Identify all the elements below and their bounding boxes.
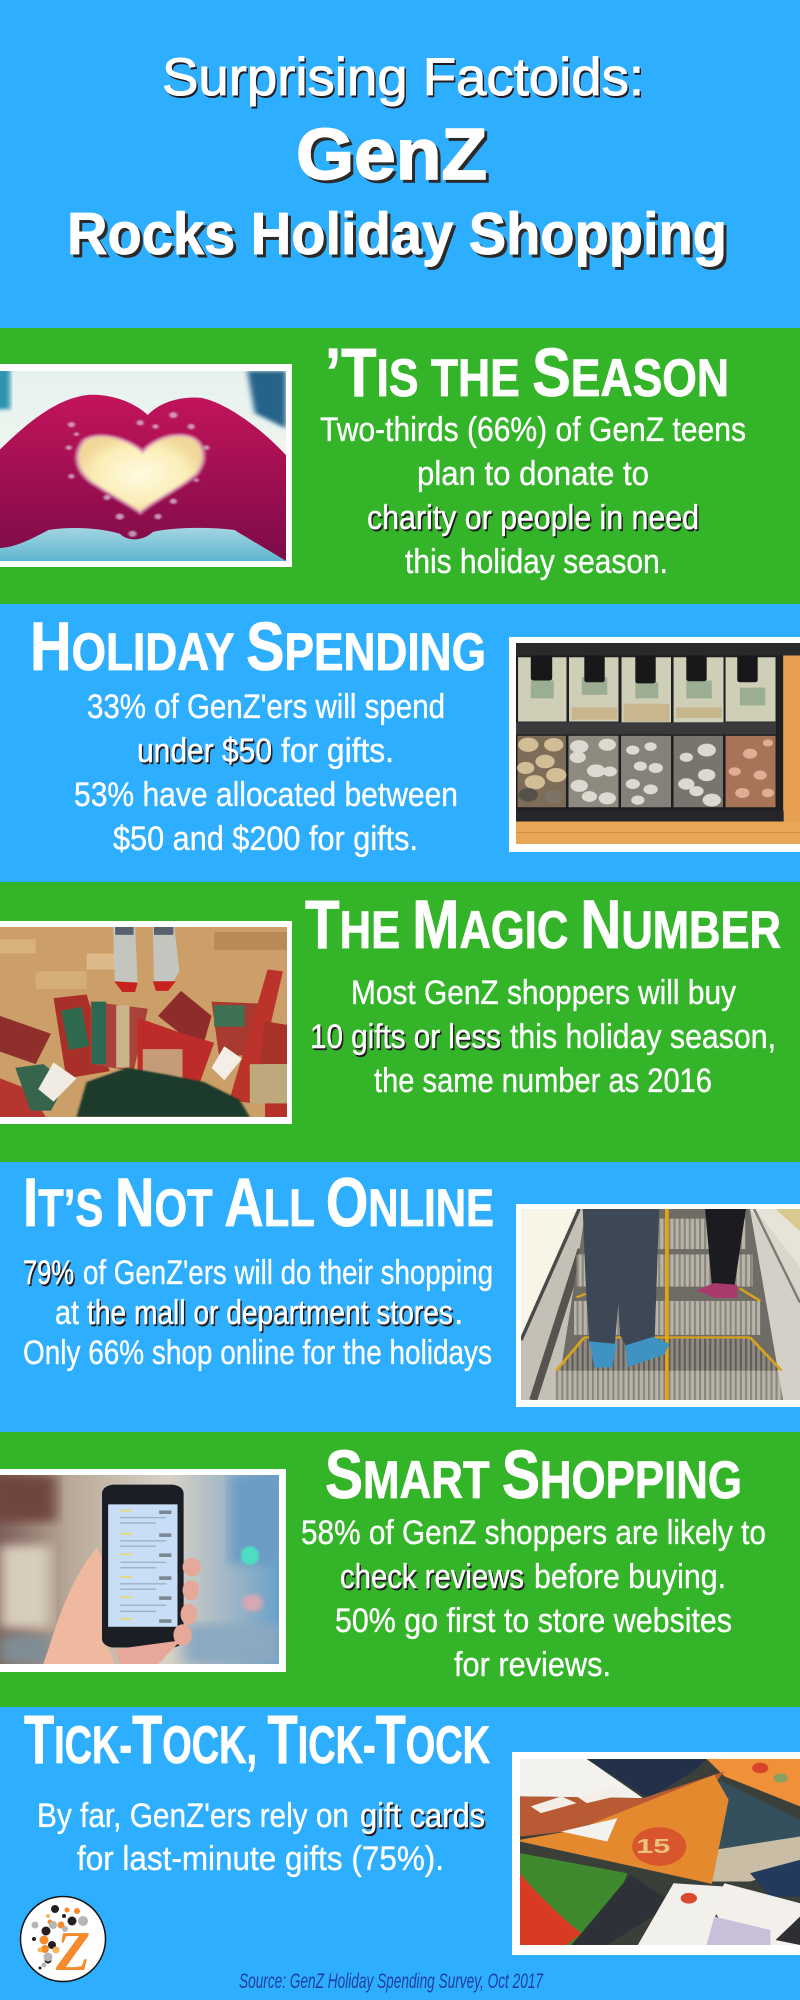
text block: checking reviews: 50% go first to store websites [335,1602,732,1640]
title line: GenZ: GenZ [296,115,487,195]
text block: number of gifts: the same number as 2016 [374,1062,712,1100]
text block: where GenZ shops: . [454,1294,463,1332]
heading: Smart Shopping: SMART SHOPPING [325,1436,742,1513]
panel: Holiday Spending background [0,604,800,882]
title line: Surprising Factoids: Surprising Factoids: [162,48,644,107]
panel: It's Not All Online background [0,1162,800,1432]
text block: donate to charity: this holiday season. [405,543,668,581]
text block: gift cards: gift cards [360,1797,485,1835]
text block: where GenZ shops: the mall or department stores [87,1294,453,1332]
text block: checking reviews: before buying. [534,1558,726,1596]
text block: donate to charity [320,411,746,581]
panel: Smart Shopping background [0,1432,800,1707]
text block: number of gifts: 10 gifts or less [310,1018,501,1056]
photo: pile of gift cards: 15 [636,1836,670,1858]
text block: donate to charity: plan to donate to [417,455,649,493]
title [67,48,727,267]
photo: cash register drawer [509,637,800,852]
text block: gift spending amounts: for gifts. [281,732,394,770]
heading: 'Tis the Season: ’TIS THE SEASON [325,334,729,411]
photo: wrapped gifts and socks [0,921,292,1124]
text block: gift spending amounts: 33% of GenZ'ers will spend [87,688,445,726]
text block: where GenZ shops: of GenZ'ers will do their shopping [83,1254,493,1292]
photo: pile of gift cards [512,1752,800,1955]
panel: title background [0,0,800,328]
text block: gift cards: By far, GenZ'ers rely on [37,1797,349,1835]
text block: donate to charity: charity or people in need [367,499,699,537]
text block: checking reviews: for reviews. [454,1646,611,1684]
photo: hand holding phone [0,1469,286,1672]
text block: gift spending amounts: $50 and $200 for gifts. [113,820,418,858]
heading: It's Not All Online: IT’S NOT ALL ONLINE [23,1164,494,1241]
text block: gift cards [37,1797,485,1878]
panel: 'Tis the Season background [0,328,800,604]
text block: gift spending amounts: under $50 [137,732,272,770]
text block: where GenZ shops [23,1254,493,1372]
text block: checking reviews: check reviews [340,1558,524,1596]
text block: number of gifts [310,974,776,1100]
source note: Source: GenZ Holiday Spending Survey, Oct 2017 [239,1970,544,1993]
text block: number of gifts: Most GenZ shoppers will buy [351,974,736,1012]
logo letter Z: Z [55,1921,90,1983]
text block: where GenZ shops: Only 66% shop online for the holidays [23,1334,492,1372]
text block: gift spending amounts [74,688,458,858]
panel: The Magic Number background [0,882,800,1162]
text block: gift cards: for last-minute gifts (75%). [77,1840,444,1878]
text block: gift spending amounts: 53% have allocated between [74,776,458,814]
photo: legs on an escalator [516,1204,800,1407]
text block: number of gifts: this holiday season, [510,1018,776,1056]
logo: Z dots circle [20,1896,106,1983]
text block: where GenZ shops: 79% [23,1254,74,1292]
heading: Tick-Tock, Tick-Tock: TICK-TOCK, TICK-TOCK [24,1701,490,1778]
text block: where GenZ shops: at [55,1294,79,1332]
panel: Tick-Tock background [0,1707,800,2000]
title line: Rocks Holiday Shopping: Rocks Holiday Shopping [67,201,727,267]
text block: checking reviews [301,1514,766,1684]
text block: donate to charity: Two-thirds (66%) of GenZ teens [320,411,746,449]
photo: mittens forming a heart [0,364,292,567]
heading: Holiday Spending: HOLIDAY SPENDING [30,608,486,685]
